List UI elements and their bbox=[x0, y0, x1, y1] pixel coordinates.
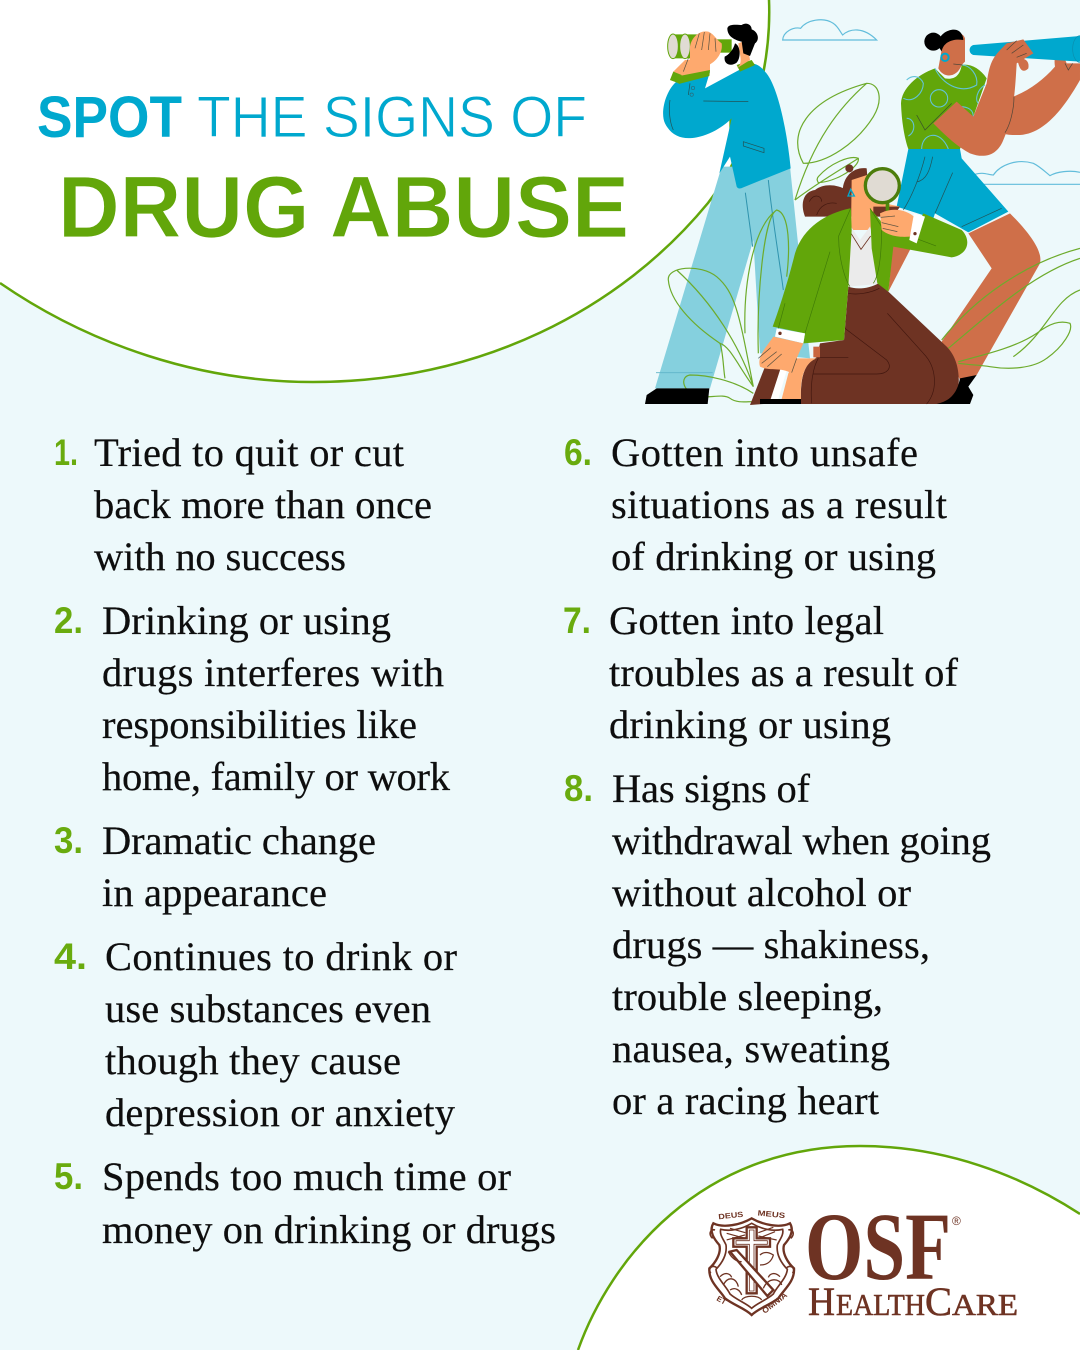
title line: spot the signs of: THE SIGNS OF bbox=[197, 85, 587, 150]
logo wordmark HealthCare: ARE bbox=[952, 1287, 1018, 1322]
logo shield crest: OMNIA bbox=[760, 1290, 789, 1316]
list item 3: in appearance bbox=[102, 870, 327, 915]
clouds bbox=[783, 20, 1080, 184]
logo shield crest bbox=[709, 1208, 794, 1316]
list item 2: drugs interferes with bbox=[102, 650, 444, 695]
illustration: three people searching bbox=[645, 20, 1080, 405]
title line: spot the signs of: SPOT bbox=[37, 85, 182, 150]
list item 5 bbox=[54, 1154, 556, 1252]
list item 8: drugs — shakiness, bbox=[612, 922, 930, 967]
list item 8: Has signs of bbox=[612, 766, 810, 811]
list item 5: 5. bbox=[54, 1156, 83, 1197]
man with binoculars bbox=[655, 24, 810, 388]
logo shield crest: ET bbox=[715, 1294, 728, 1307]
OSF HealthCare logo: ® bbox=[952, 1214, 961, 1228]
logo shield crest: DEUS bbox=[718, 1210, 744, 1221]
list item 4: though they cause bbox=[105, 1038, 401, 1083]
bottom white curved logo panel bbox=[578, 1146, 1080, 1350]
list item 6: 6. bbox=[564, 432, 592, 473]
list item 8: without alcohol or bbox=[612, 870, 912, 915]
list item 3: Dramatic change bbox=[102, 818, 376, 863]
list item 1: back more than once bbox=[94, 482, 432, 527]
list item 3: 3. bbox=[54, 820, 83, 861]
list item 1 bbox=[54, 430, 432, 579]
list item 7: Gotten into legal bbox=[609, 598, 884, 643]
list item 4: Continues to drink or bbox=[105, 934, 458, 979]
list item 2: home, family or work bbox=[102, 754, 451, 799]
list item 6: Gotten into unsafe bbox=[611, 430, 918, 475]
list item 4: 4. bbox=[54, 936, 87, 977]
title line: spot the signs of bbox=[37, 85, 587, 150]
background plant outlines bbox=[668, 83, 879, 402]
list item 8 bbox=[564, 766, 991, 1123]
foreground plant outlines bbox=[942, 248, 1080, 368]
woman with telescope bbox=[888, 30, 1080, 380]
list item 4 bbox=[54, 934, 458, 1135]
list item 6: of drinking or using bbox=[611, 534, 936, 579]
list item 8: 8. bbox=[564, 768, 593, 809]
list item 1: Tried to quit or cut bbox=[94, 430, 405, 475]
list item 7: troubles as a result of bbox=[609, 650, 958, 695]
list item 5: money on drinking or drugs bbox=[102, 1207, 556, 1252]
logo shield crest: MEUS bbox=[757, 1208, 786, 1220]
list item 4: use substances even bbox=[105, 986, 431, 1031]
list item 7: drinking or using bbox=[609, 702, 891, 747]
logo wordmark OSF: OSF bbox=[805, 1193, 951, 1300]
title bbox=[37, 85, 629, 256]
list item 6: situations as a result bbox=[611, 482, 948, 527]
list item 1: with no success bbox=[94, 534, 346, 579]
list item 7: 7. bbox=[563, 600, 591, 641]
title line: drug abuse: DRUG ABUSE bbox=[58, 159, 629, 256]
list item 3 bbox=[54, 818, 376, 915]
top white curved panel bbox=[0, 0, 769, 382]
logo wordmark HealthCare: C bbox=[925, 1279, 952, 1324]
list item 2 bbox=[54, 598, 451, 799]
OSF HealthCare logo bbox=[709, 1193, 1018, 1324]
list item 2: 2. bbox=[54, 600, 83, 641]
logo wordmark HealthCare: H bbox=[808, 1279, 835, 1324]
logo wordmark HealthCare bbox=[808, 1279, 1018, 1324]
logo wordmark HealthCare: EALTH bbox=[836, 1287, 925, 1322]
list item 2: Drinking or using bbox=[102, 598, 391, 643]
list item 8: or a racing heart bbox=[612, 1078, 880, 1123]
woman with magnifying glass bbox=[645, 164, 977, 405]
list item 6 bbox=[564, 430, 948, 579]
list item 8: nausea, sweating bbox=[612, 1026, 890, 1071]
list item 8: trouble sleeping, bbox=[612, 974, 883, 1019]
list item 4: depression or anxiety bbox=[105, 1090, 456, 1135]
list item 2: responsibilities like bbox=[102, 702, 417, 747]
list item 7 bbox=[563, 598, 958, 747]
list item 8: withdrawal when going bbox=[612, 818, 991, 863]
list item 5: Spends too much time or bbox=[102, 1154, 512, 1199]
list item 1: 1. bbox=[54, 432, 78, 473]
